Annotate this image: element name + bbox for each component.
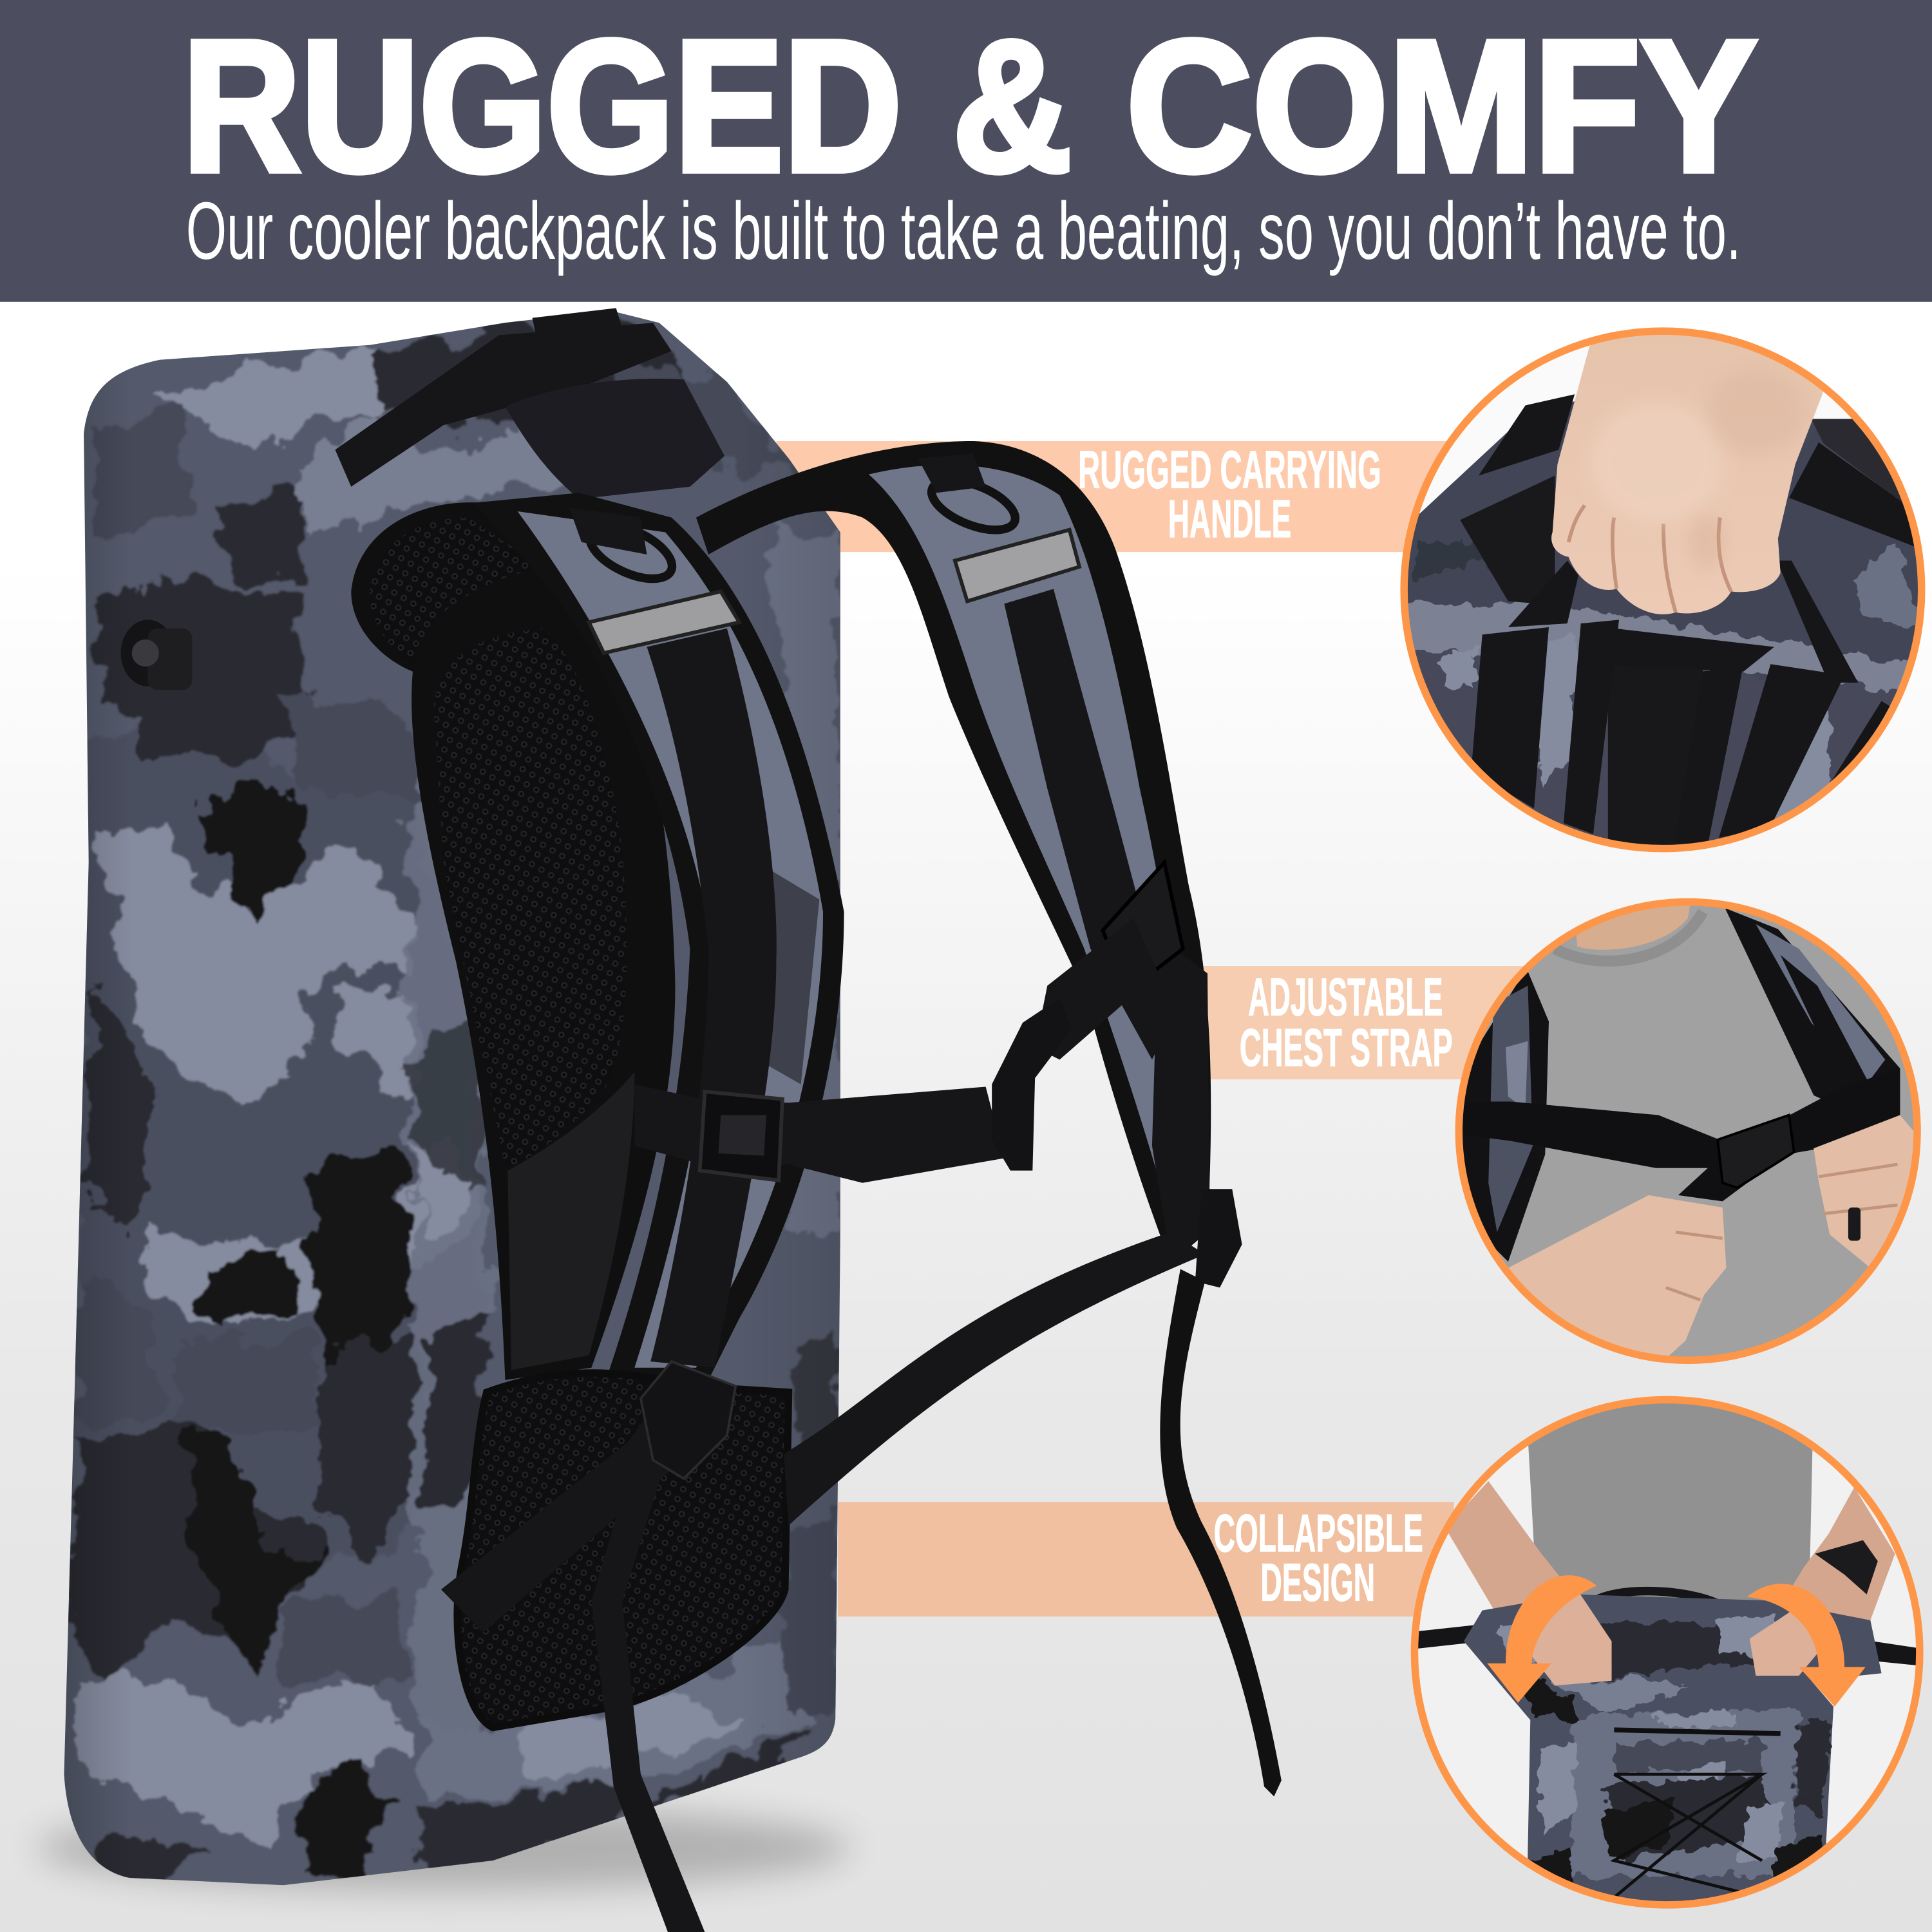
side straps bbox=[1417, 1624, 1484, 1649]
title: COMFY bbox=[1126, 1, 1757, 211]
inset photo: adjustable chest strap bbox=[1454, 893, 1922, 1368]
bungee cord bbox=[1614, 1774, 1762, 1897]
chest strap and buckles bbox=[634, 998, 1072, 1183]
label: adjustable chest strap: ADJUSTABLE bbox=[1248, 969, 1443, 1027]
right hand bbox=[1814, 1115, 1922, 1268]
header banner bbox=[0, 0, 1932, 302]
label: adjustable chest strap bbox=[1240, 969, 1453, 1077]
label: collapsible design: DESIGN bbox=[1260, 1553, 1375, 1612]
roll-top strap and buckle bbox=[335, 308, 724, 499]
webbing bbox=[1608, 659, 1703, 850]
callout band: rugged carrying handle bbox=[776, 441, 1466, 552]
label: rugged carrying handle: RUGGED CARRYING bbox=[1078, 441, 1381, 500]
camo bag bbox=[1464, 1595, 1882, 1912]
shirt bbox=[1454, 900, 1922, 1368]
label: adjustable chest strap: CHEST STRAP bbox=[1240, 1019, 1453, 1077]
inset photo: hand on carrying handle bbox=[1401, 314, 1932, 862]
arrow right bbox=[1747, 1584, 1866, 1707]
ring bbox=[1848, 1208, 1861, 1241]
hand bbox=[1551, 335, 1823, 614]
arrow left bbox=[1487, 1575, 1597, 1703]
title: RUGGED bbox=[182, 1, 902, 211]
lower harness straps bbox=[441, 1189, 1282, 1932]
label: collapsible design bbox=[1214, 1504, 1423, 1612]
arms bbox=[1445, 1481, 1612, 1681]
camo body bbox=[50, 296, 862, 1910]
neck bbox=[1577, 905, 1690, 950]
callout band: collapsible design bbox=[838, 1502, 1454, 1616]
right shoulder strap bbox=[696, 441, 1211, 1263]
handle bbox=[1508, 561, 1578, 627]
right strap bbox=[1725, 908, 1900, 1135]
valve bbox=[121, 620, 192, 690]
shirt bbox=[1526, 1392, 1814, 1614]
left strap bbox=[1454, 969, 1549, 1262]
backpack main photo bbox=[50, 296, 1282, 1932]
left hand bbox=[1454, 1195, 1726, 1368]
strap bbox=[1464, 1068, 1900, 1201]
left shoulder strap bbox=[475, 493, 844, 1392]
callout band: adjustable chest strap bbox=[1201, 966, 1534, 1079]
zipper bbox=[1614, 1730, 1781, 1734]
backpack shadow bbox=[37, 1806, 850, 1890]
hands bbox=[1528, 1589, 1612, 1685]
title: & bbox=[952, 1, 1072, 211]
title bbox=[182, 1, 1757, 211]
label: collapsible design: COLLAPSIBLE bbox=[1214, 1504, 1423, 1563]
handle bbox=[1589, 1591, 1725, 1608]
label: rugged carrying handle: HANDLE bbox=[1168, 490, 1291, 549]
watch bbox=[1815, 1540, 1878, 1595]
back mesh padding bbox=[351, 502, 675, 1380]
lower mesh pad bbox=[457, 1373, 788, 1727]
inset photo: collapsible design bbox=[1412, 1392, 1922, 1912]
bag top bbox=[1408, 401, 1918, 687]
label: rugged carrying handle bbox=[1078, 441, 1381, 549]
